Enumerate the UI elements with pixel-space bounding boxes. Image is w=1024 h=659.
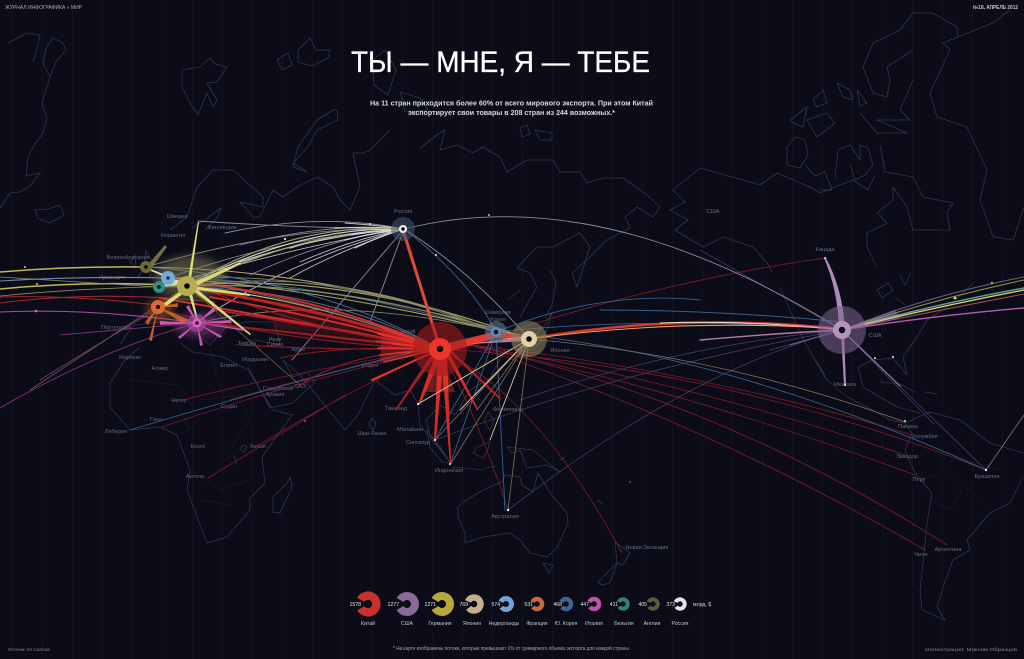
- illustrator credit: Иллюстрация: Максим Образцов: [925, 647, 1018, 652]
- legend item: italy: Италия: [585, 621, 603, 627]
- country labels: Индонезия: [435, 468, 463, 474]
- legend: export volumes: [349, 593, 711, 627]
- country labels: США: [707, 209, 720, 215]
- country labels: Саудовская: [263, 386, 293, 392]
- country labels: Перу: [913, 477, 926, 483]
- legend item: belgium: 411: [610, 602, 618, 608]
- hub: usa: [818, 306, 866, 354]
- hub: italy: [188, 314, 206, 332]
- legend item: south korea: 468: [553, 602, 562, 608]
- legend item: uk: Англия: [644, 621, 661, 627]
- country labels: Финляндия: [207, 225, 237, 231]
- source credit: Источник: UN Comtrade: [8, 647, 50, 652]
- country labels: Чили: [914, 552, 928, 558]
- country labels: Мексика: [834, 382, 857, 388]
- hub: belgium: [153, 281, 165, 293]
- country labels: Норвегия: [161, 233, 185, 239]
- legend item: belgium: [610, 598, 634, 627]
- country labels: Канада: [816, 247, 835, 253]
- legend item: russia: [666, 598, 689, 627]
- legend item: russia: Россия: [671, 621, 689, 627]
- legend item: usa: 1277: [387, 602, 399, 608]
- legend item: italy: [580, 597, 603, 627]
- country labels: Гана: [150, 417, 163, 423]
- country labels: Португалия: [101, 325, 131, 331]
- country labels: [99, 209, 999, 558]
- hub: russia: [391, 217, 415, 241]
- country labels: Либерия: [105, 429, 127, 435]
- country labels: Марокко: [119, 355, 141, 361]
- country labels: Сирия: [267, 342, 283, 348]
- country labels: Конго: [191, 444, 205, 450]
- country labels: Эквадор: [896, 454, 918, 460]
- legend item: netherlands: [489, 596, 520, 627]
- country labels: Иран: [291, 347, 305, 353]
- legend item: russia: 373: [666, 602, 675, 608]
- legend item: south korea: [553, 597, 577, 627]
- country labels: Ангола: [186, 474, 205, 480]
- legend unit: млрд. $: [693, 602, 711, 608]
- intro text: экспортирует свои товары в 208 стран из 244 возможных.*: [408, 108, 615, 117]
- country labels: Китай: [400, 328, 416, 335]
- country labels: США: [869, 333, 882, 339]
- legend item: france: 531: [524, 602, 533, 608]
- country labels: ОАЭ: [294, 384, 306, 390]
- legend item: netherlands: Нидерланды: [489, 621, 520, 627]
- country labels: Алжир: [152, 366, 168, 372]
- flows: usa right edge band: [842, 277, 1024, 330]
- flows: russia rays: [402, 231, 441, 347]
- flows: china to europe red band: [146, 268, 440, 385]
- flows: china south rays: [395, 339, 529, 465]
- country labels: Ирак: [269, 337, 282, 343]
- country labels: Австралия: [491, 514, 519, 520]
- header left: ЖУРНАЛ ИНФОГРАФИКА » МИР: [5, 5, 82, 11]
- legend item: south korea: Ю. Корея: [555, 621, 577, 627]
- hub: south korea: [485, 321, 507, 343]
- legend item: japan: 769: [459, 602, 468, 608]
- legend item: belgium: Бельгия: [614, 621, 634, 627]
- country labels: Таиланд: [385, 406, 408, 412]
- flows: europe hub bursts: [145, 222, 251, 346]
- hub: germany: [177, 276, 197, 296]
- country labels: Северная: [485, 310, 511, 316]
- country labels: Шри-Ланка: [358, 431, 387, 437]
- country labels: Нигер: [171, 398, 187, 404]
- country labels: Колумбия: [912, 434, 938, 440]
- legend item: netherlands: 574: [491, 602, 500, 608]
- legend item: uk: [638, 598, 661, 627]
- country labels: Сингапур: [406, 440, 430, 446]
- legend item: italy: 447: [580, 602, 589, 608]
- legend item: usa: [387, 593, 418, 627]
- header right: №18, АПРЕЛЬ 2012: [973, 5, 1018, 11]
- hub: japan: [511, 321, 547, 357]
- country labels: Судан: [221, 404, 237, 410]
- hub: netherlands: [161, 271, 175, 285]
- country labels: Египет: [220, 363, 238, 369]
- country labels: Бразилия: [975, 474, 999, 480]
- flows: thin long-distance lines: [0, 217, 1024, 553]
- country labels: Иордания: [242, 357, 268, 363]
- legend item: germany: 1271: [424, 602, 436, 608]
- intro text: На 11 стран приходится более 60% от всего мирового экспорта. При этом Китай: [370, 98, 653, 108]
- country labels: Малайзия: [397, 426, 423, 433]
- legend item: uk: 405: [638, 602, 647, 608]
- legend item: france: [524, 597, 548, 627]
- flow node dots: [24, 214, 993, 511]
- legend item: germany: [424, 593, 453, 627]
- intro text: [370, 98, 653, 117]
- flows: china japan usa band: [440, 310, 842, 354]
- flows: usa north and south rays: [790, 258, 900, 386]
- flows: europe to russia and asia: [146, 223, 529, 349]
- legend item: usa: США: [401, 621, 414, 627]
- legend item: germany: Германия: [428, 621, 452, 627]
- country labels: Индия: [362, 363, 378, 369]
- country labels: Новая Зеландия: [626, 545, 668, 551]
- country labels: Турция: [238, 341, 256, 347]
- country labels: Аравия: [265, 392, 285, 398]
- legend item: france: Франция: [526, 621, 548, 627]
- hub: china: [413, 322, 467, 376]
- country labels: Аргентина: [935, 547, 962, 553]
- legend item: china: 1578: [349, 602, 361, 608]
- flows: europe left edge band: [0, 267, 215, 323]
- title: ТЫ — МНЕ, Я — ТЕБЕ: [351, 46, 650, 79]
- hub: united kingdom: [140, 261, 152, 273]
- country labels: Россия: [394, 209, 412, 215]
- country labels: Япония: [550, 348, 570, 354]
- country labels: Ирландия: [99, 275, 125, 281]
- legend item: japan: Япония: [463, 621, 481, 627]
- country labels: Швеция: [167, 214, 187, 220]
- legend item: china: [349, 593, 379, 627]
- footnote: * На карте изображены потоки, которые превышают 1% от суммарного объема экспорта для каждой страны.: [393, 645, 630, 652]
- legend item: japan: [459, 595, 483, 627]
- legend item: china: Китай: [361, 620, 375, 627]
- country labels: Великобритания: [107, 255, 149, 261]
- hub: france: [151, 300, 165, 314]
- country labels: Кения: [250, 444, 266, 450]
- country labels: Панама: [898, 424, 919, 430]
- country labels: Корея: [490, 317, 506, 323]
- country labels: Филиппины: [493, 407, 523, 413]
